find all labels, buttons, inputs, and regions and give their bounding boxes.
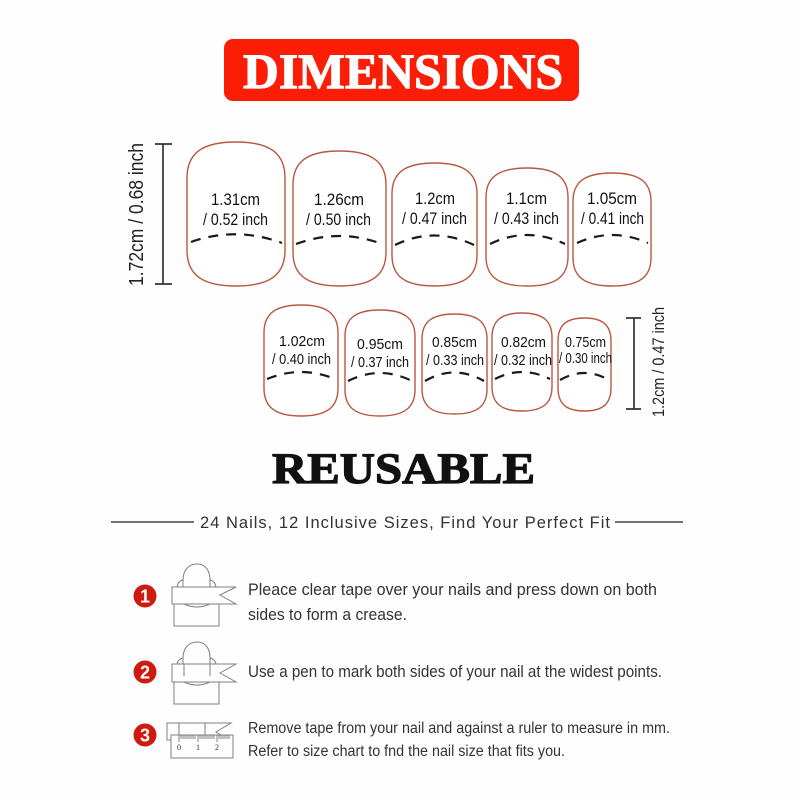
nail 1.26cm (293, 151, 386, 286)
icon: tape on ruler: 0 (177, 743, 181, 752)
height scale: small nails: 1.2cm / 0.47 inch (649, 307, 668, 417)
nail 0.85cm: 0.85cm (432, 334, 477, 351)
heading: reusable: REUSABLE (272, 446, 535, 493)
nail 1.31cm: / 0.52 inch (203, 211, 268, 229)
icon: number 2 badge (134, 660, 156, 684)
icon: tape on ruler: 1 (196, 743, 200, 752)
step 3 text (248, 720, 670, 760)
height scale: large nails (126, 143, 172, 286)
icon: number 1 badge: 1 (140, 586, 150, 606)
nail 0.95cm (345, 310, 415, 416)
step 3 text: Remove tape from your nail and against a ruler to measure in mm. (248, 720, 670, 737)
step 1 text: Pleace clear tape over your nails and press down on both (248, 581, 657, 599)
step 1 text (248, 581, 657, 624)
step 2 (134, 642, 662, 704)
nail 0.75cm: / 0.30 inch (559, 351, 612, 367)
nail 0.75cm (558, 318, 612, 411)
nail 1.02cm: / 0.40 inch (272, 351, 331, 368)
nail 0.75cm: 0.75cm (565, 335, 606, 351)
nail 1.1cm: 1.1cm (506, 190, 547, 208)
title banner: DIMENSIONS (243, 43, 563, 99)
nail 1.26cm: / 0.50 inch (306, 211, 371, 229)
nail row: large sizes (187, 142, 651, 286)
height scale: small nails (626, 307, 668, 417)
nail 0.82cm: 0.82cm (501, 334, 546, 351)
nail 1.02cm: 1.02cm (279, 333, 325, 350)
icon: tape on ruler (167, 723, 233, 758)
nail 0.82cm (492, 313, 552, 411)
icon: number 3 badge (134, 724, 156, 746)
icon: number 2 badge: 2 (140, 662, 150, 682)
nail 0.95cm: / 0.37 inch (351, 354, 409, 371)
nail 0.95cm: 0.95cm (357, 336, 403, 353)
subtitle with side rules: 24 Nails, 12 Inclusive Sizes, Find Your Perfect Fit (200, 514, 610, 532)
icon: tape with pen marks (172, 642, 236, 704)
nail 0.85cm (422, 314, 487, 414)
nail 0.82cm: / 0.32 inch (494, 352, 552, 369)
nail 1.1cm: / 0.43 inch (494, 210, 559, 228)
icon: number 3 badge: 3 (140, 726, 150, 746)
nail 1.2cm: / 0.47 inch (402, 210, 467, 228)
step 2 text: Use a pen to mark both sides of your nail at the widest points. (248, 663, 662, 681)
nail 1.2cm (392, 163, 477, 286)
nail 1.05cm: / 0.41 inch (581, 210, 644, 228)
icon: tape on ruler: 2 (215, 743, 219, 752)
nail 1.05cm (573, 173, 651, 286)
step 3 (134, 720, 670, 760)
icon: tape over nail (172, 564, 236, 626)
nail 1.02cm (264, 305, 338, 416)
icon: number 1 badge (134, 584, 156, 608)
nail 1.31cm: 1.31cm (211, 191, 260, 209)
height scale: large nails: 1.72cm / 0.68 inch (126, 143, 148, 286)
nail 1.05cm: 1.05cm (587, 190, 637, 208)
nail 0.85cm: / 0.33 inch (426, 352, 484, 369)
nail row: small sizes (264, 305, 612, 416)
step 3 text: Refer to size chart to fnd the nail size that fits you. (248, 743, 565, 760)
nail 1.31cm (187, 142, 285, 286)
nail 1.1cm (486, 168, 568, 286)
nail 1.2cm: 1.2cm (415, 190, 455, 208)
nail 1.26cm: 1.26cm (314, 191, 364, 209)
step 1 text: sides to form a crease. (248, 606, 407, 624)
step 1 (134, 564, 657, 626)
